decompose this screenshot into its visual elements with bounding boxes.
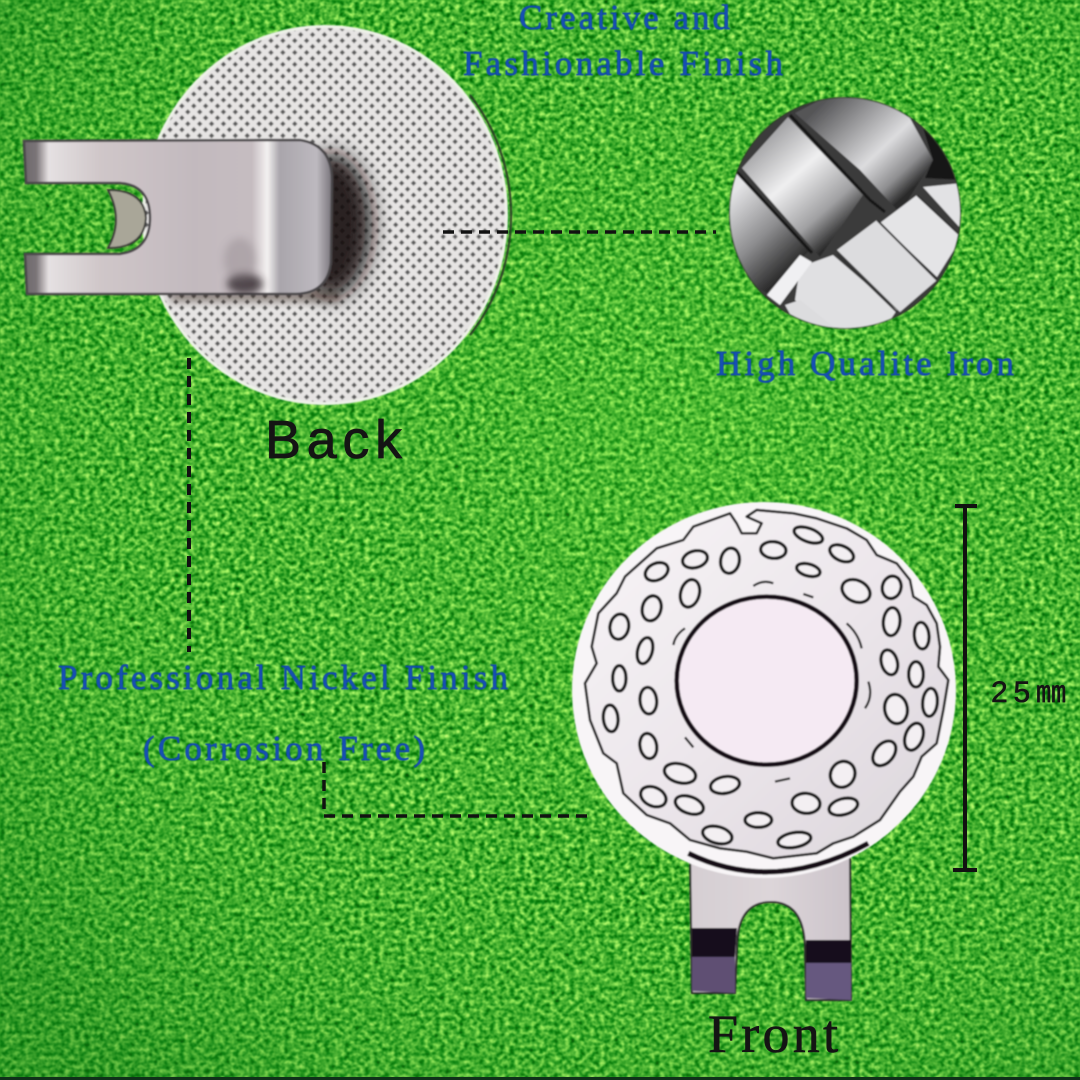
front stem clip	[690, 850, 851, 1000]
back clip	[24, 140, 332, 294]
heading: creative finish: Fashionable Finish	[463, 44, 784, 83]
label: Front: Front	[708, 1004, 838, 1064]
dashed connector: nickel label to front	[324, 762, 590, 816]
dashed connector: back to nickel label	[187, 358, 191, 652]
bottom black rim	[688, 843, 868, 872]
dimples	[602, 524, 939, 850]
heading: creative finish	[463, 0, 784, 83]
label: nickel finish: Professional Nickel Finish	[58, 658, 508, 697]
notch crescent	[108, 190, 146, 248]
small highlight marks	[673, 582, 870, 782]
front marker	[572, 502, 956, 1000]
center magnet	[677, 597, 857, 765]
iron detail circle	[725, 95, 965, 335]
label: nickel finish	[58, 658, 508, 768]
dashed connector: back to iron	[443, 230, 716, 234]
dimension bar: 25mm: 25㎜	[991, 676, 1066, 709]
back view of marker with clip	[24, 25, 511, 405]
label: Back: Back	[265, 410, 403, 470]
label: nickel finish: (Corrosion Free)	[143, 729, 425, 768]
wavy ball outline	[585, 510, 948, 858]
label: high quality iron: High Qualite Iron	[716, 344, 1014, 383]
